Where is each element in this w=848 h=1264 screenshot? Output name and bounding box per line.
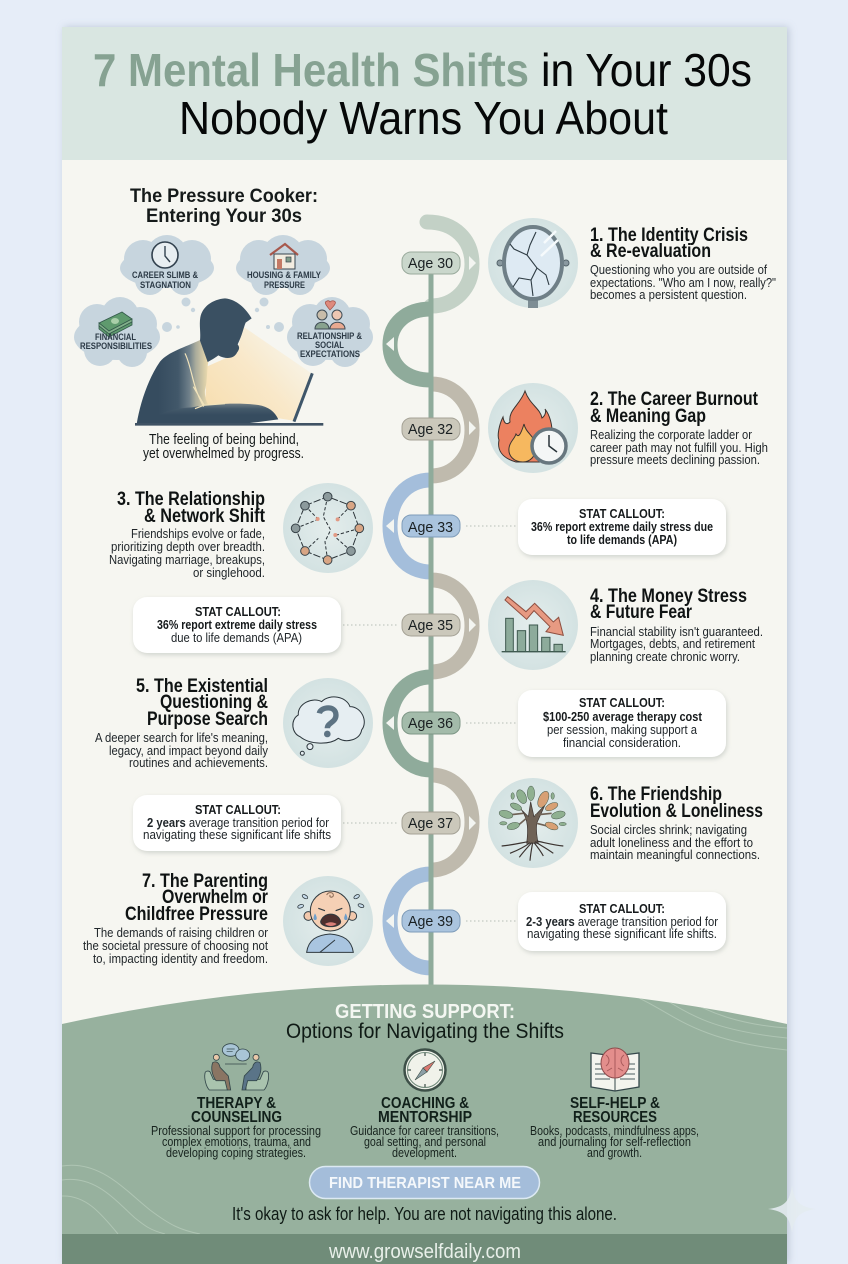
stat callout: age 35: STAT CALLOUT:: [195, 604, 281, 619]
option: therapy and counseling: developing coping strategies.: [166, 1146, 306, 1160]
option: coaching and mentorship: Guidance for career transitions,: [350, 1124, 499, 1138]
icon: book and brain: [591, 1048, 639, 1091]
heading 1: [590, 225, 748, 262]
age 39 pill: Age 39: [408, 913, 453, 930]
heading 7: Overwhelm or: [162, 887, 268, 908]
option: self-help and resources: and growth.: [587, 1146, 642, 1160]
shift 1: identity crisis: [488, 218, 776, 308]
option: coaching and mentorship: [350, 1050, 499, 1160]
heading: getting support: [286, 1000, 564, 1043]
heading 1: & Re-evaluation: [590, 241, 711, 262]
heading 4: [590, 586, 747, 623]
heading: getting support: GETTING SUPPORT:: [335, 1000, 515, 1023]
description 6: [590, 822, 760, 862]
heading 6: 6. The Friendship: [590, 784, 722, 805]
thought cloud: relationship: EXPECTATIONS: [300, 349, 360, 359]
age 32 pill: Age 32: [408, 421, 453, 438]
title: in Your 30s: [541, 44, 752, 96]
icon: flame and clock: [488, 383, 578, 473]
icon: crying baby: [283, 876, 373, 966]
option: therapy and counseling: COUNSELING: [191, 1109, 282, 1126]
stat callout: age 36: STAT CALLOUT:: [579, 695, 665, 710]
heading: pressure cooker: Entering Your 30s: [146, 205, 302, 227]
age 37 pill: [402, 812, 460, 834]
thought cloud: relationship: SOCIAL: [315, 340, 344, 350]
footer bar: www.growselfdaily.com: [328, 1241, 521, 1263]
shift 7: parenting overwhelm: [83, 871, 373, 966]
description 7: The demands of raising children or: [94, 925, 269, 940]
footer bar: [62, 1234, 787, 1264]
age 37 pill: Age 37: [408, 815, 453, 832]
description 4: planning create chronic worry.: [590, 649, 740, 664]
age 35 pill: Age 35: [408, 617, 453, 634]
stat callout: age 36: per session, making support a: [547, 722, 698, 737]
title: 7 Mental Health Shifts: [93, 44, 529, 96]
description 2: [590, 427, 768, 467]
heading 2: & Meaning Gap: [590, 406, 706, 427]
age 30 pill: [402, 252, 460, 274]
heading 5: 5. The Existential: [136, 676, 268, 697]
option: self-help and resources: SELF-HELP &: [570, 1095, 660, 1112]
heading: pressure cooker: [130, 185, 318, 227]
option: therapy and counseling: Professional support for processing: [151, 1124, 321, 1138]
shift 6: friendship evolution: [488, 778, 763, 868]
shift 2: career burnout: [488, 383, 768, 473]
option: coaching and mentorship: development.: [392, 1146, 457, 1160]
heading 7: Childfree Pressure: [125, 904, 268, 925]
thought cloud: housing: HOUSING & FAMILY: [247, 270, 321, 280]
description 2: Realizing the corporate ladder or: [590, 427, 753, 442]
thought cloud: financial: FINANCIAL: [95, 332, 136, 342]
title: [93, 44, 752, 144]
heading 3: [117, 489, 266, 527]
option: therapy and counseling: THERAPY &: [197, 1095, 276, 1112]
description 6: adult loneliness and the effort to: [590, 835, 753, 850]
shift 4: money stress: [488, 580, 763, 670]
description 3: [109, 526, 265, 580]
age 39 pill: [402, 910, 460, 932]
header band: [62, 27, 787, 160]
panel: the pressure cooker: [74, 185, 373, 462]
icon: compass: [404, 1050, 446, 1090]
stat callout: age 39: [518, 892, 726, 951]
age markers: [402, 252, 460, 932]
heading 4: & Future Fear: [590, 602, 692, 623]
age 33 pill: Age 33: [408, 519, 453, 536]
title: Nobody Warns You About: [179, 92, 668, 144]
shift 3: relationship shift: [109, 483, 373, 580]
button: find therapist: FIND THERAPIST NEAR ME: [329, 1175, 521, 1192]
stat callout: age 39: navigating these significant life shifts.: [527, 926, 717, 941]
description 4: Mortgages, debts, and retirement: [590, 636, 755, 651]
option: coaching and mentorship: COACHING &: [381, 1095, 469, 1112]
description 7: to, impacting identity and freedom.: [93, 951, 268, 966]
thought cloud: career: CAREER SLIMB &: [132, 270, 198, 280]
heading 7: [125, 871, 268, 925]
description 4: [590, 624, 763, 664]
option: coaching and mentorship: goal setting, and personal: [364, 1135, 486, 1149]
stat callout: age 36: $100-250 average therapy cost: [543, 709, 703, 724]
stat callout: age 36: [518, 690, 726, 757]
heading 3: 3. The Relationship: [117, 489, 265, 510]
icon: broken network: [283, 483, 373, 573]
illustration: person at laptop: [135, 298, 323, 424]
stat callout: age 35: [133, 597, 341, 653]
stat callout: age 39: STAT CALLOUT:: [579, 901, 665, 916]
caption: The feeling of being behind,: [149, 432, 299, 448]
description 7: the societal pressure of choosing not: [83, 938, 268, 953]
heading 5: Questioning &: [160, 692, 268, 713]
direction arrows: [386, 256, 476, 928]
heading 4: 4. The Money Stress: [590, 586, 747, 607]
thought cloud: career: [120, 235, 214, 295]
panel: getting support: [62, 984, 787, 1264]
thought cloud: relationship: RELATIONSHIP &: [297, 331, 362, 341]
icon: tree: [488, 778, 578, 868]
timeline stem: [428, 270, 434, 986]
age 33 pill: [402, 515, 460, 537]
thought cloud: housing: [236, 235, 330, 295]
age 36 pill: Age 36: [408, 715, 453, 732]
winding timeline: [386, 222, 476, 986]
stat callout: age 37: STAT CALLOUT:: [195, 802, 281, 817]
thought cloud: housing: PRESSURE: [264, 280, 305, 290]
heading: pressure cooker: The Pressure Cooker:: [130, 185, 318, 207]
stat callout: age 35: 36% report extreme daily stress: [157, 617, 317, 632]
heading 1: 1. The Identity Crisis: [590, 225, 748, 246]
thought cloud: financial: [74, 297, 160, 367]
thought cloud: relationship: [287, 297, 373, 367]
stat callout: age 39: 2-3 years average transition period for: [526, 914, 719, 929]
closing message: It's okay to ask for help. You are not navigating this alone.: [232, 1204, 617, 1224]
description 5: routines and achievements.: [129, 755, 268, 770]
description 2: career path may not fulfill you. High: [590, 440, 768, 455]
description 3: prioritizing depth over breadth.: [111, 539, 265, 554]
heading 3: & Network Shift: [144, 506, 266, 527]
description 6: Social circles shrink; navigating: [590, 822, 747, 837]
button: find therapist: [310, 1166, 540, 1198]
heading 2: 2. The Career Burnout: [590, 389, 759, 410]
icon: question cloud: [283, 678, 373, 768]
heading 2: [590, 389, 759, 427]
option: self-help and resources: and journaling for self-reflection: [538, 1135, 691, 1149]
heading 7: 7. The Parenting: [142, 871, 268, 892]
icon: cracked mirror: [488, 218, 578, 308]
icon: sparkle: [768, 1185, 816, 1233]
heading 5: [136, 676, 268, 730]
caption: yet overwhelmed by progress.: [143, 446, 304, 462]
age 35 pill: [402, 614, 460, 636]
option: self-help and resources: RESOURCES: [573, 1109, 657, 1126]
description 5: A deeper search for life's meaning,: [95, 730, 268, 745]
option: therapy and counseling: complex emotions, trauma, and: [162, 1135, 311, 1149]
stat callout: age 35: due to life demands (APA): [171, 630, 302, 645]
description 6: maintain meaningful connections.: [590, 847, 760, 862]
stat callout: age 37: navigating these significant life shifts: [143, 827, 331, 842]
age 36 pill: [402, 712, 460, 734]
description 1: expectations. "Who am I now, really?": [590, 275, 776, 290]
stat callout: age 37: [133, 795, 341, 851]
description 1: becomes a persistent question.: [590, 287, 747, 302]
heading: getting support: Options for Navigating the Shifts: [286, 1019, 564, 1043]
heading 5: Purpose Search: [147, 709, 268, 730]
stat callout: age 33: [518, 499, 726, 555]
thought cloud: financial: RESPONSIBILITIES: [80, 341, 152, 351]
stat callout: age 33: to life demands (APA): [567, 532, 677, 547]
option: coaching and mentorship: MENTORSHIP: [378, 1109, 472, 1126]
caption: [143, 432, 304, 462]
age 30 pill: Age 30: [408, 255, 453, 272]
option: therapy and counseling: [151, 1044, 321, 1160]
option: self-help and resources: Books, podcasts, mindfulness apps,: [530, 1124, 699, 1138]
heading 6: Evolution & Loneliness: [590, 801, 763, 822]
description 7: [83, 925, 269, 966]
stat callout: age 33: STAT CALLOUT:: [579, 506, 665, 521]
description 3: or singlehood.: [193, 565, 265, 580]
icon: falling chart: [488, 580, 578, 670]
description 2: pressure meets declining passion.: [590, 452, 760, 467]
description 1: [590, 262, 776, 302]
age 32 pill: [402, 418, 460, 440]
description 4: Financial stability isn't guaranteed.: [590, 624, 763, 639]
description 5: [95, 730, 268, 770]
stat callout: age 37: 2 years average transition period for: [147, 815, 330, 830]
thought dots: [162, 298, 284, 332]
description 5: legacy, and impact beyond daily: [109, 743, 268, 758]
option: self-help and resources: [530, 1048, 699, 1160]
shift 5: existential questioning: [95, 676, 373, 770]
description 1: Questioning who you are outside of: [590, 262, 767, 277]
description 3: Friendships evolve or fade,: [131, 526, 265, 541]
thought cloud: career: STAGNATION: [140, 280, 191, 290]
stat callout: age 33: 36% report extreme daily stress due: [531, 519, 713, 534]
heading 6: [590, 784, 763, 822]
stat callout: age 36: financial consideration.: [563, 735, 681, 750]
icon: therapy session: [205, 1044, 269, 1090]
description 3: Navigating marriage, breakups,: [109, 552, 265, 567]
